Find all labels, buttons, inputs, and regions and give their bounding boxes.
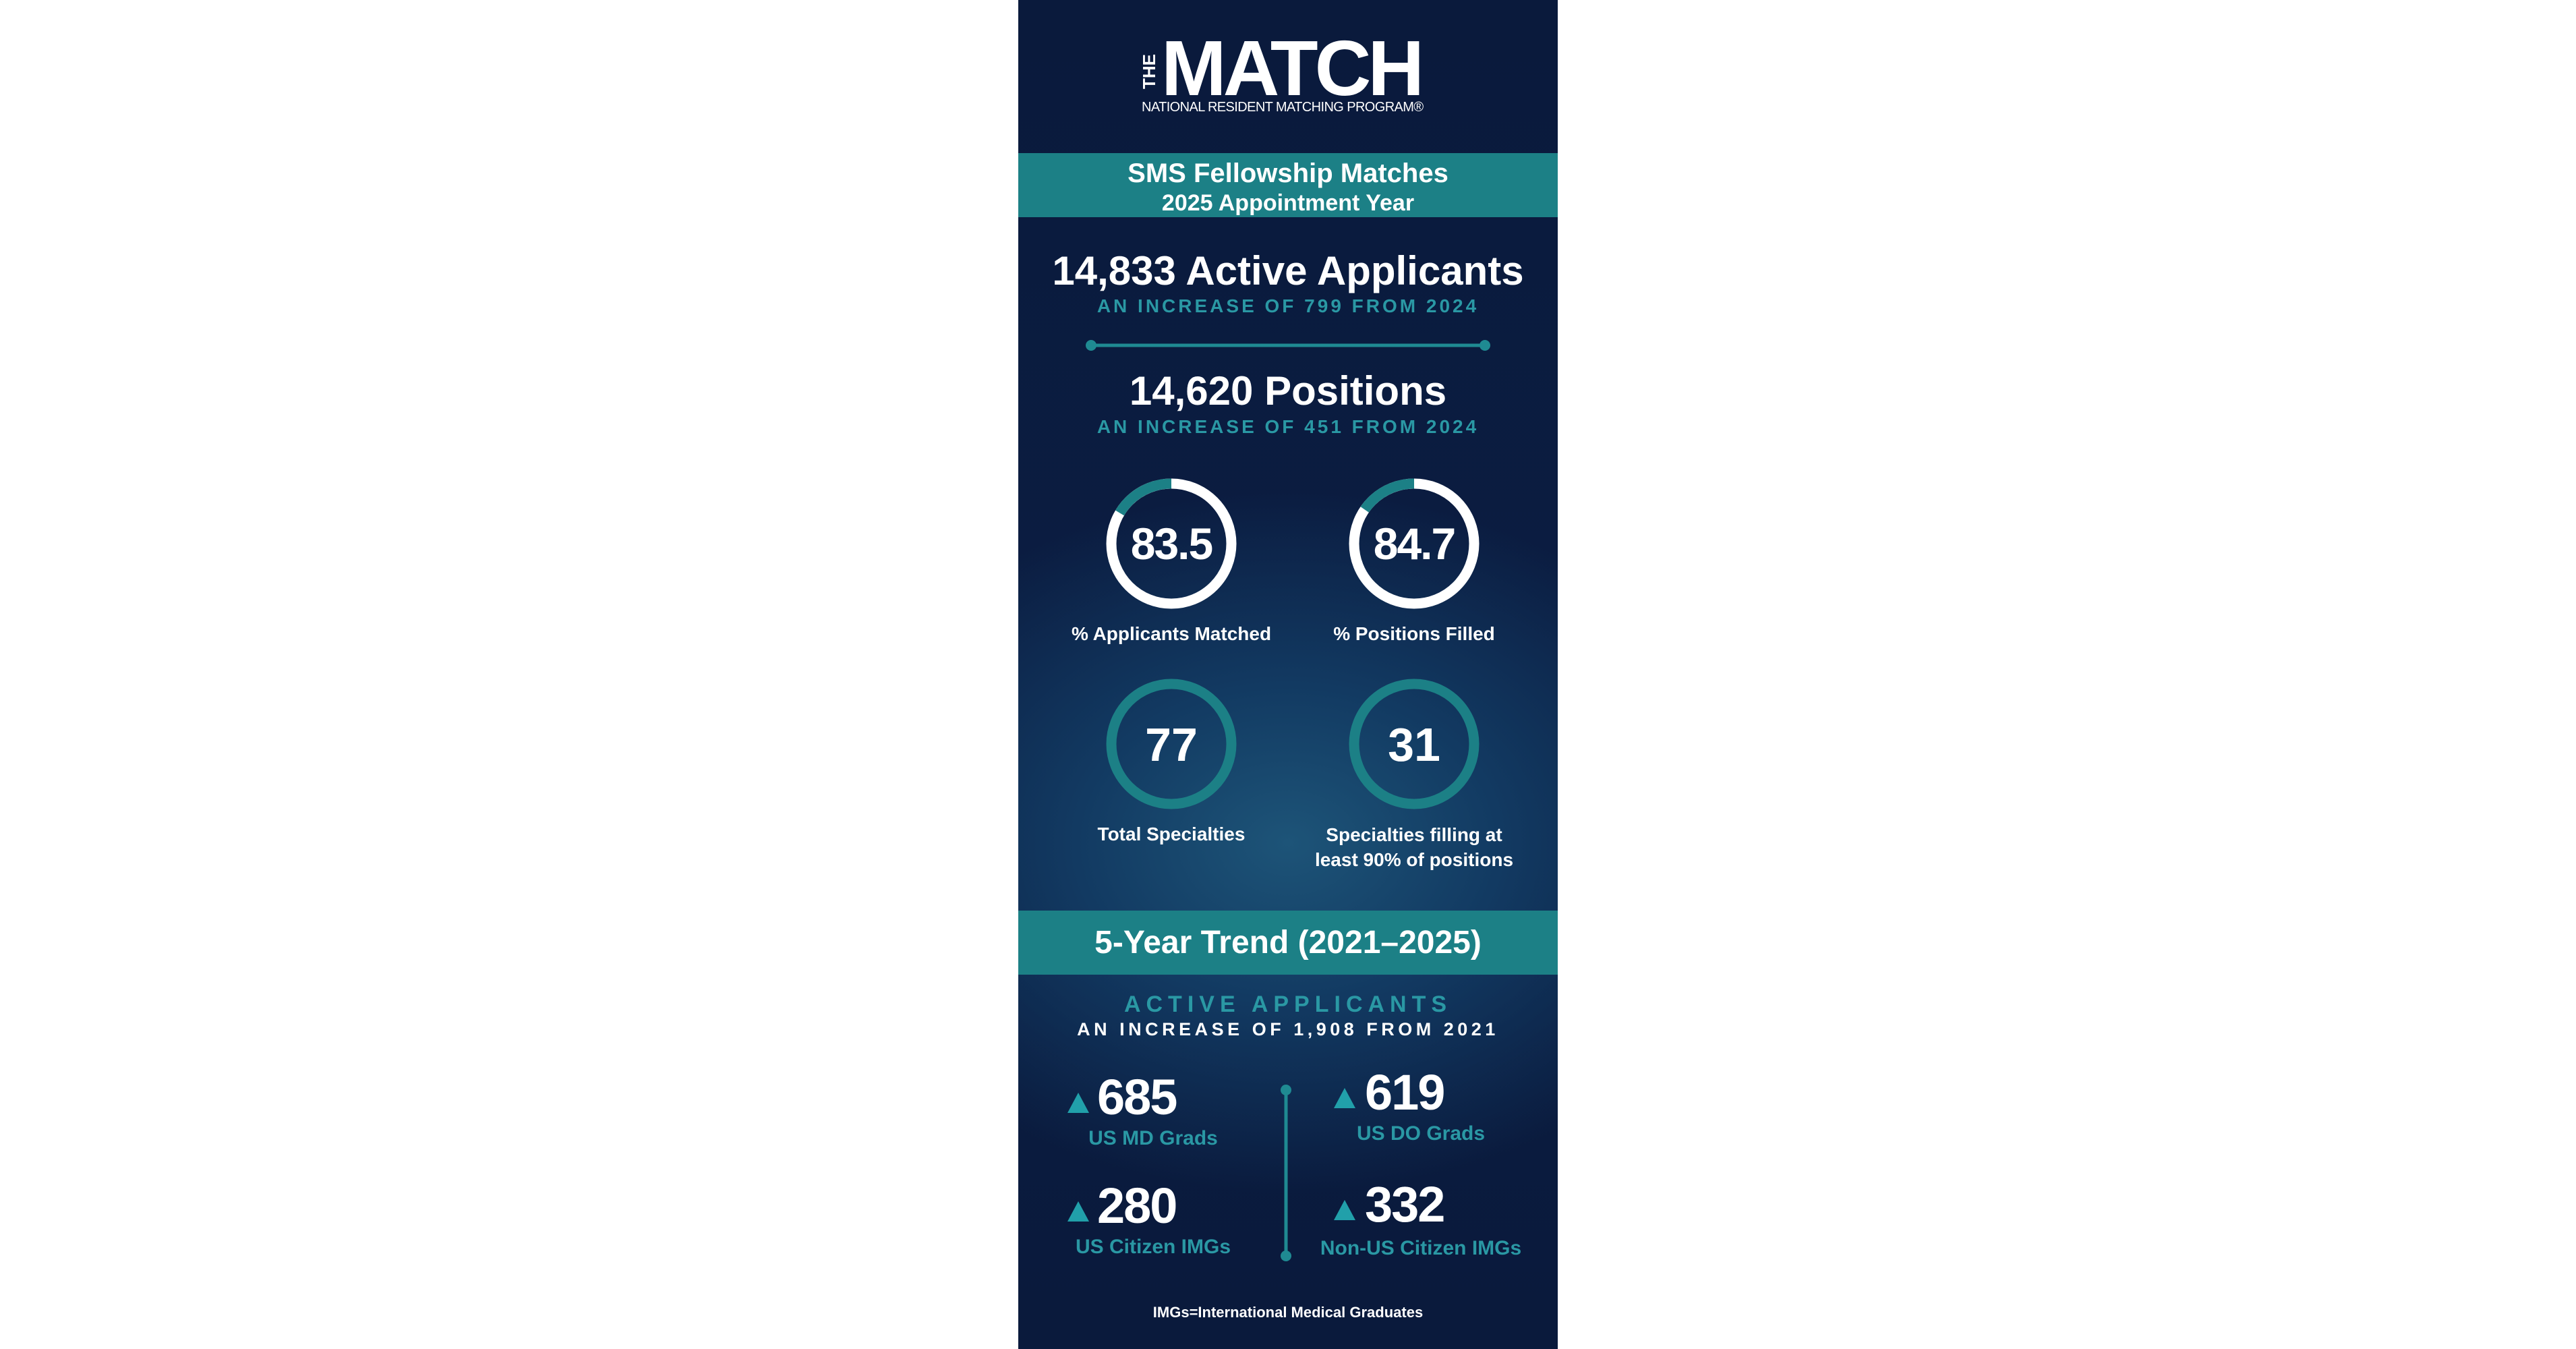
stat: US citizen IMGs: 280 (1097, 1178, 1176, 1234)
stat: US citizen IMGs (1067, 1178, 1231, 1258)
divider with dots (1086, 340, 1490, 351)
stat: non-US citizen IMGs (1320, 1176, 1521, 1259)
ring: applicants matched: 83.5 (1131, 519, 1212, 569)
ring: applicants matched (1106, 479, 1237, 608)
label: applicants matched: % Applicants Matched (1072, 623, 1271, 644)
ring: total specialties: 77 (1145, 718, 1198, 771)
header band: SMS Fellowship Matches: SMS Fellowship Matches (1128, 159, 1448, 188)
logo: The Match: NATIONAL RESIDENT MATCHING PROGRAM® (1142, 100, 1423, 115)
ring: positions filled (1349, 479, 1480, 608)
stat: US DO grads (1334, 1064, 1485, 1145)
band: 5-year trend: 5-Year Trend (2021–2025) (1094, 925, 1482, 960)
stat: US MD grads: US MD Grads (1088, 1127, 1218, 1149)
ring: positions filled: 84.7 (1374, 519, 1455, 569)
stat: positions: 14,620 Positions (1130, 368, 1446, 413)
stat: non-US citizen IMGs: 332 (1365, 1176, 1444, 1232)
heading: active applicants: ACTIVE APPLICANTS (1124, 992, 1452, 1017)
subtext: positions increase: AN INCREASE OF 451 FROM 2024 (1097, 416, 1479, 437)
label: specialties filling 90%: least 90% of positions (1315, 849, 1513, 870)
stat: US DO grads: US DO Grads (1357, 1122, 1485, 1145)
ring: total specialties (1106, 679, 1237, 809)
vertical divider (1281, 1085, 1291, 1261)
ring: specialties 90%: 31 (1388, 718, 1440, 771)
label: total specialties: Total Specialties (1098, 824, 1245, 844)
stat: non-US citizen IMGs: Non-US Citizen IMGs (1320, 1237, 1521, 1259)
stat: US MD grads (1067, 1069, 1218, 1149)
stat: active applicants: 14,833 Active Applicants (1052, 248, 1524, 293)
stat: US MD grads: 685 (1097, 1069, 1176, 1125)
footnote: IMGs=International Medical Graduates (1153, 1304, 1423, 1321)
label: specialties filling 90% (1315, 824, 1513, 870)
logo: The Match: MATCH (1161, 24, 1421, 112)
ring: specialties 90% (1349, 679, 1480, 809)
stat: US citizen IMGs: US Citizen IMGs (1076, 1236, 1231, 1258)
panel: infographic (1018, 0, 1558, 1349)
label: specialties filling 90%: Specialties filling at (1326, 824, 1502, 845)
subtext: increase since 2021: AN INCREASE OF 1,908 FROM 2021 (1077, 1019, 1499, 1039)
header band: SMS Fellowship Matches: 2025 Appointment Year (1162, 190, 1414, 216)
header band: SMS Fellowship Matches (1018, 153, 1558, 217)
logo: The Match: THE (1139, 54, 1159, 89)
band: 5-year trend (1018, 911, 1558, 975)
stat: US DO grads: 619 (1365, 1064, 1444, 1120)
subtext: applicants increase: AN INCREASE OF 799 FROM 2024 (1097, 295, 1479, 316)
label: positions filled: % Positions Filled (1333, 623, 1495, 644)
